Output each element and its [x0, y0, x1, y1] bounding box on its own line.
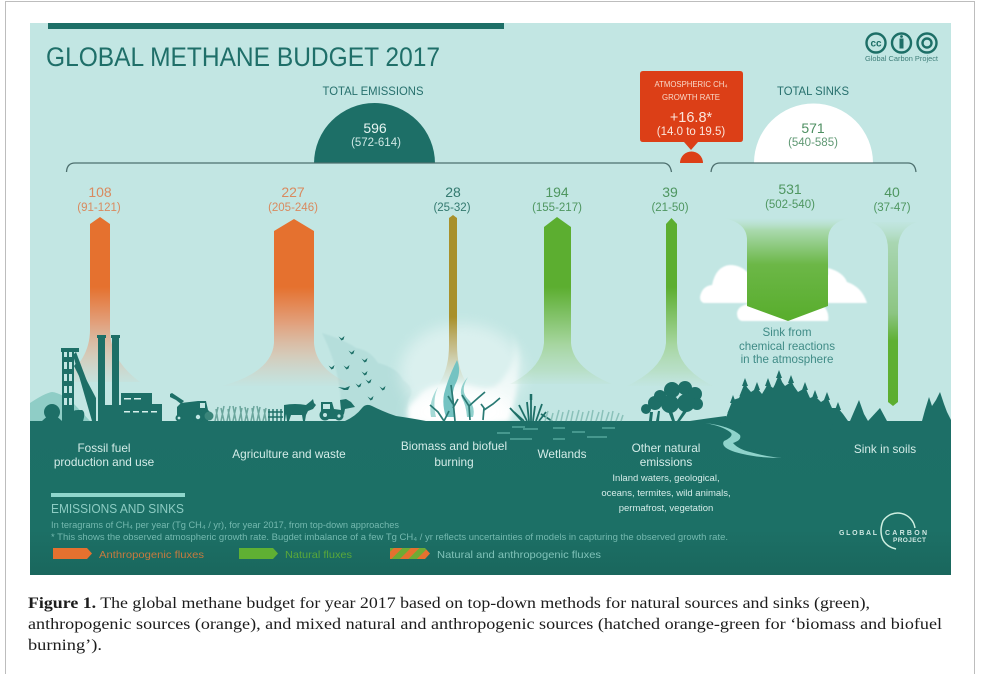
total sinks dome: 571	[801, 120, 825, 136]
birds	[328, 336, 386, 400]
total sinks dome	[754, 104, 873, 163]
legend	[51, 493, 728, 561]
fence	[268, 409, 283, 421]
logo: Global Carbon Project: PROJECT	[893, 537, 926, 544]
callout: atmospheric growth rate: +16.8*	[670, 110, 713, 126]
icon: cow	[284, 399, 316, 421]
forest silhouette	[724, 370, 887, 434]
caption: anthropogenic sources (orange), and mixed natural and anthropogenic sources (hatched orange-green for ‘biomass and biofuel	[28, 616, 943, 633]
caption: burning’).	[28, 637, 102, 654]
value: soil sink: 40	[884, 184, 900, 200]
label: sink from chemical reactions	[739, 326, 835, 366]
label: fossil fuel: production and use	[54, 455, 155, 469]
value: soil sink	[873, 184, 911, 214]
legend: mixed	[390, 548, 430, 559]
legend: natural	[239, 548, 278, 559]
label: biomass: burning	[434, 455, 474, 469]
crops	[215, 406, 266, 421]
value: other natural: (21-50)	[651, 202, 689, 214]
wetland grass	[510, 394, 623, 421]
label: other natural emissions	[601, 441, 731, 514]
label: sink from chemical reactions: in the atmosphere	[741, 353, 833, 366]
caption	[28, 595, 943, 654]
callout: atmospheric growth rate: ATMOSPHERIC CH₄	[654, 80, 728, 89]
arrow: agriculture emissions	[222, 219, 356, 386]
label: other natural emissions: permafrost, vegetation	[619, 503, 713, 514]
legend: In teragrams of CH₄ per year (Tg CH₄ / yr), for year 2017, from top-down approaches	[51, 520, 400, 530]
icon: tractor	[320, 399, 355, 420]
clouds behind chemical sink	[700, 265, 867, 321]
value: fossil fuel	[77, 184, 121, 214]
label: fossil fuel: Fossil fuel	[77, 441, 131, 455]
value: biomass: 28	[445, 184, 461, 200]
legend: anthropogenic	[53, 548, 92, 559]
total emissions dome	[314, 103, 435, 164]
value: soil sink: (37-47)	[873, 202, 911, 214]
icon: coal mine and factory	[42, 335, 162, 421]
total sinks dome: (540-585)	[788, 137, 838, 149]
icon: licence badges: cc	[870, 38, 882, 50]
value: fossil fuel: 108	[88, 184, 112, 200]
arrow: fossil fuel emissions	[60, 217, 140, 382]
waste mound	[345, 405, 426, 421]
icon: licence badges	[865, 34, 939, 63]
arrow: biomass emissions	[438, 215, 468, 385]
legend: Natural fluxes	[285, 549, 352, 561]
callout: atmospheric growth rate: GROWTH RATE	[662, 93, 720, 102]
value: wetlands: (155-217)	[532, 202, 582, 214]
value: chemical sink: 531	[778, 181, 802, 197]
logo: Global Carbon Project: CARBON	[885, 530, 927, 537]
logo: Global Carbon Project: GLOBAL	[839, 530, 878, 537]
label: wetlands: Wetlands	[538, 447, 587, 461]
value: fossil fuel: (91-121)	[77, 202, 121, 214]
title accent bar	[48, 23, 504, 29]
heading: total emissions: TOTAL EMISSIONS	[322, 84, 424, 98]
arrow: wetlands emissions	[510, 217, 612, 384]
total emissions dome: (572-614)	[351, 137, 401, 149]
icon: licence badges: Global Carbon Project	[865, 54, 939, 63]
label: other natural emissions: Inland waters, geological,	[612, 473, 720, 484]
title: GLOBAL METHANE BUDGET 2017	[46, 42, 440, 72]
river	[705, 423, 782, 458]
callout: atmospheric growth rate	[640, 71, 743, 163]
value: wetlands	[532, 184, 582, 214]
legend: * This shows the observed atmospheric growth rate. Bugdet imbalance of a few Tg CH₄ / yr reflects uncertainties of models in capturing the observed growth rate.	[51, 532, 728, 542]
legend: Anthropogenic fluxes	[99, 549, 204, 561]
label: agriculture: Agriculture and waste	[232, 447, 346, 461]
value: chemical sink	[765, 181, 815, 211]
label: biomass: Biomass and biofuel	[401, 439, 507, 453]
arrow: other natural emissions	[627, 218, 713, 386]
icon: combine harvester	[170, 393, 214, 422]
value: other natural	[651, 184, 689, 214]
water reflections	[497, 427, 615, 439]
value: wetlands: 194	[545, 184, 569, 200]
value: biomass	[433, 184, 471, 214]
ground	[30, 421, 951, 575]
heading: total sinks: TOTAL SINKS	[777, 84, 849, 98]
label: sink from chemical reactions: chemical reactions	[739, 340, 835, 353]
label: other natural emissions: emissions	[640, 455, 692, 469]
label: other natural emissions: Other natural	[632, 441, 700, 455]
label: sink from chemical reactions: Sink from	[763, 326, 811, 339]
caption: Figure 1. The global methane budget for year 2017 based on top-down methods for natural sources and sinks (green),	[28, 595, 870, 612]
legend: Natural and anthropogenic fluxes	[437, 549, 601, 561]
icon: burning trees and flames	[430, 360, 500, 421]
label: other natural emissions: oceans, termites, wild animals,	[601, 488, 731, 499]
background hills and smoke	[30, 324, 524, 432]
ridge	[690, 416, 730, 421]
value: agriculture: 227	[281, 184, 305, 200]
sinks bracket	[711, 163, 916, 172]
right tree group	[922, 392, 951, 421]
value: biomass: (25-32)	[433, 202, 471, 214]
icon: tree	[641, 381, 703, 421]
arrow: soil sink	[870, 222, 917, 406]
total emissions dome: 596	[363, 120, 387, 136]
panel: infographic background	[30, 23, 951, 575]
label: biomass	[401, 439, 507, 469]
value: other natural: 39	[662, 184, 678, 200]
legend: EMISSIONS AND SINKS	[51, 501, 184, 516]
value: chemical sink: (502-540)	[765, 199, 815, 211]
label: fossil fuel	[54, 441, 155, 469]
value: agriculture	[268, 184, 318, 214]
arrow: chemical sink	[722, 218, 850, 321]
label: sink in soils: Sink in soils	[854, 442, 916, 456]
callout: atmospheric growth rate: (14.0 to 19.5)	[657, 126, 725, 138]
logo: Global Carbon Project	[839, 513, 927, 549]
value: agriculture: (205-246)	[268, 202, 318, 214]
emissions bracket	[66, 163, 672, 172]
